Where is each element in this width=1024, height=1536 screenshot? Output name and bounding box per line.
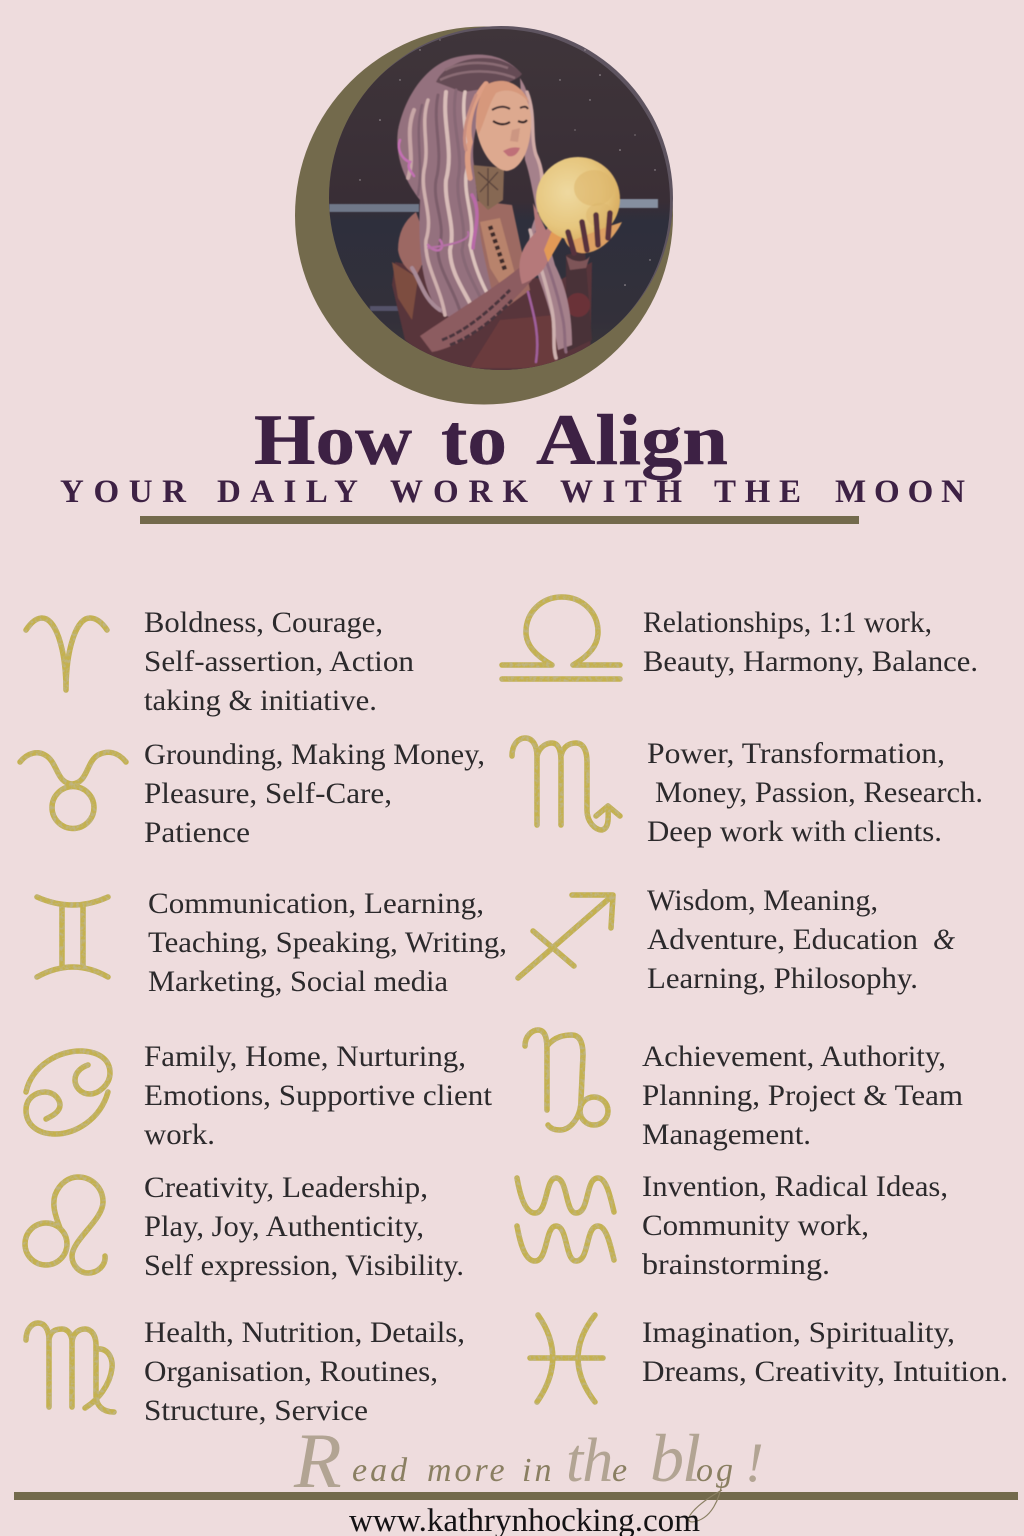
icon: scorpio <box>512 738 620 830</box>
text: sagittarius <box>647 884 956 995</box>
script call to action: th <box>566 1427 612 1495</box>
script call to action <box>293 1417 767 1522</box>
hair right mass <box>520 78 572 350</box>
text: taurus: Grounding, Making Money, <box>144 738 485 771</box>
text: gemini <box>148 887 507 998</box>
icon: leo <box>25 1177 105 1273</box>
script call to action: more <box>427 1452 508 1489</box>
far arm sleeve <box>566 250 592 352</box>
footer bar <box>14 1492 1018 1500</box>
text: libra <box>643 606 978 678</box>
text: aries: taking & initiative. <box>144 684 377 717</box>
text: leo <box>144 1171 464 1282</box>
hair crown <box>436 58 522 92</box>
text: aquarius <box>642 1170 948 1281</box>
text: leo: Self expression, Visibility. <box>144 1249 464 1282</box>
text: virgo: Structure, Service <box>144 1394 368 1427</box>
shoulder and chest <box>397 212 422 274</box>
lower dress <box>392 262 592 375</box>
text: sagittarius: Wisdom, Meaning, <box>647 884 878 917</box>
icon: pisces <box>530 1315 603 1402</box>
script call to action: ead <box>352 1452 410 1489</box>
text: scorpio <box>647 737 983 848</box>
text: virgo <box>144 1316 465 1427</box>
face <box>476 86 531 171</box>
text: sagittarius: & <box>933 923 956 956</box>
moon ball <box>536 157 620 241</box>
text: gemini: Teaching, Speaking, Writing, <box>148 926 507 959</box>
text: sagittarius: Learning, Philosophy. <box>647 962 918 995</box>
subtitle: WITH <box>560 474 682 510</box>
title underline bar <box>140 516 859 524</box>
text: cancer: work. <box>144 1118 215 1151</box>
subtitle: YOUR <box>60 474 187 510</box>
title: Align <box>536 400 728 480</box>
script call to action: og <box>696 1452 736 1489</box>
text: capricorn: Planning, Project & Team <box>642 1079 963 1112</box>
text: aquarius: Invention, Radical Ideas, <box>642 1170 948 1203</box>
text: scorpio: Deep work with clients. <box>647 815 942 848</box>
eyes brows lips <box>492 107 528 110</box>
text: cancer: Emotions, Supportive client <box>144 1079 493 1112</box>
title <box>254 400 728 480</box>
text: virgo: Health, Nutrition, Details, <box>144 1316 465 1349</box>
text: aquarius: Community work, <box>642 1209 869 1242</box>
title: How <box>254 400 412 480</box>
text: taurus: Pleasure, Self-Care, <box>144 777 392 810</box>
text: pisces: Dreams, Creativity, Intuition. <box>642 1355 1008 1388</box>
icon: aries <box>26 618 107 690</box>
icon: cancer <box>26 1051 110 1134</box>
photo circle <box>325 22 677 375</box>
subtitle: THE <box>714 474 801 510</box>
text: libra: Beauty, Harmony, Balance. <box>643 645 978 678</box>
bodice with lacing <box>480 218 514 282</box>
text: aries <box>144 606 414 717</box>
hand on left <box>519 203 552 284</box>
script call to action: e <box>612 1452 630 1489</box>
text: capricorn: Achievement, Authority, <box>642 1040 946 1073</box>
text: capricorn <box>642 1040 963 1151</box>
icon: libra <box>502 597 620 679</box>
neck tattoo <box>473 165 504 210</box>
subtitle: MOON <box>835 474 965 510</box>
text: sagittarius: Adventure, Education <box>647 923 918 956</box>
text: cancer <box>144 1040 493 1151</box>
text: cancer: Family, Home, Nurturing, <box>144 1040 466 1073</box>
icon: virgo <box>26 1323 114 1412</box>
text: capricorn: Management. <box>642 1118 811 1151</box>
moon photo with crescent <box>295 22 677 404</box>
text: gemini: Communication, Learning, <box>148 887 484 920</box>
hair strands <box>399 84 566 362</box>
script call to action: bl <box>650 1420 700 1496</box>
hand under ball <box>564 222 622 253</box>
text: gemini: Marketing, Social media <box>148 965 448 998</box>
text: aquarius: brainstorming. <box>642 1248 830 1281</box>
text: virgo: Organisation, Routines, <box>144 1355 438 1388</box>
text: libra: Relationships, 1:1 work, <box>643 606 932 639</box>
script call to action: R <box>293 1417 342 1504</box>
subtitle: WORK <box>390 474 528 510</box>
icon: sagittarius <box>518 895 613 978</box>
text: taurus <box>144 738 485 849</box>
text: pisces <box>642 1316 1008 1388</box>
text: scorpio: Money, Passion, Research. <box>655 776 983 809</box>
icon: capricorn <box>525 1030 608 1130</box>
text: leo: Play, Joy, Authenticity, <box>144 1210 424 1243</box>
text: taurus: Patience <box>144 816 250 849</box>
subtitle: DAILY <box>217 474 358 510</box>
icon: gemini <box>37 897 108 977</box>
hair left mass <box>397 55 520 320</box>
text: aries: Boldness, Courage, <box>144 606 383 639</box>
icon: aquarius <box>517 1178 614 1261</box>
forearm with tattoo <box>420 264 532 352</box>
text: aries: Self-assertion, Action <box>144 645 414 678</box>
icon: taurus <box>20 752 126 828</box>
text: pisces: Imagination, Spirituality, <box>642 1316 955 1349</box>
script call to action: ! <box>745 1432 767 1494</box>
text: scorpio: Power, Transformation, <box>647 737 945 770</box>
script call to action: in <box>522 1452 554 1489</box>
title: to <box>441 400 507 480</box>
olive crescent <box>295 26 673 404</box>
subtitle <box>60 474 965 510</box>
text: leo: Creativity, Leadership, <box>144 1171 428 1204</box>
